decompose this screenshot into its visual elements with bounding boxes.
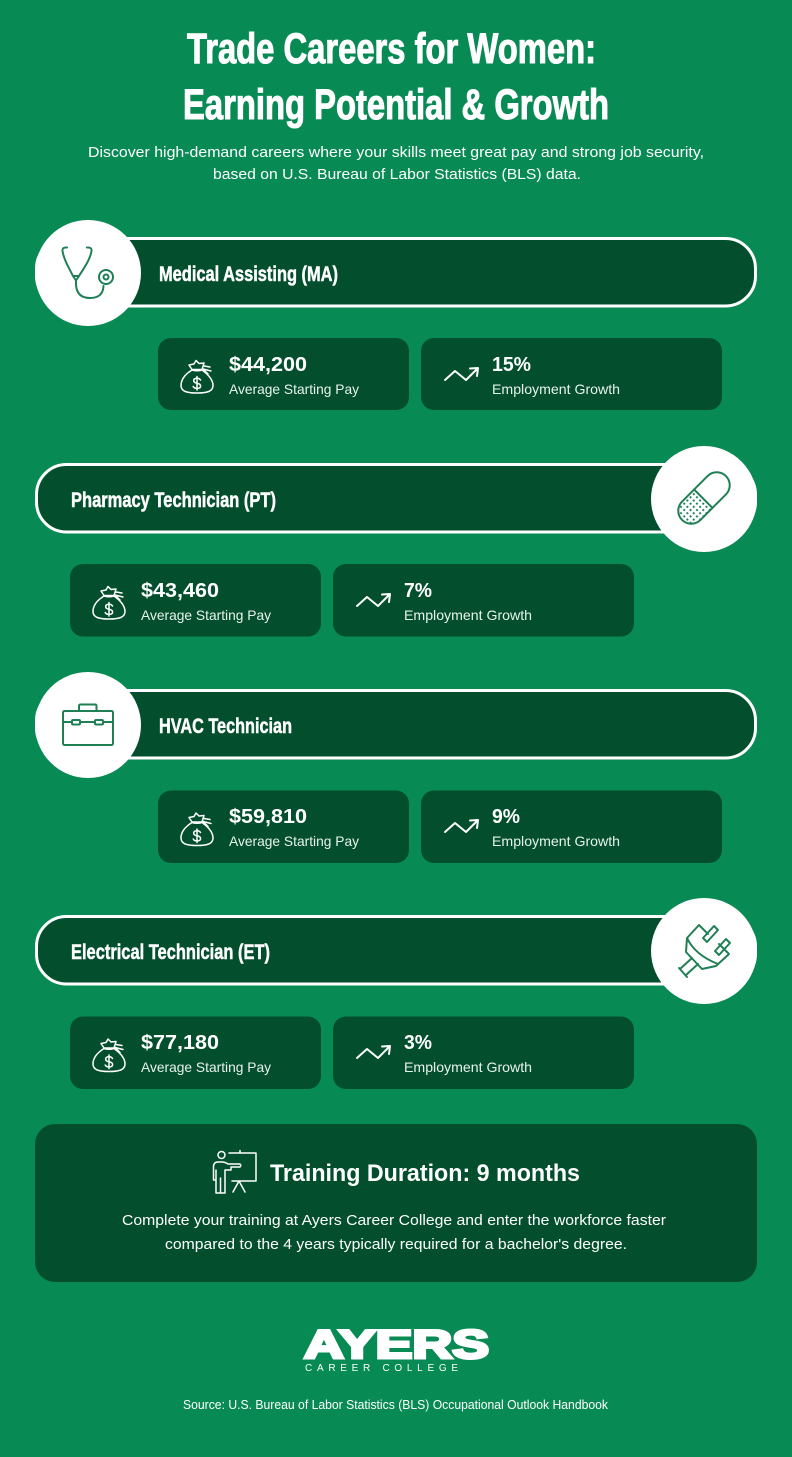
title [183,25,609,129]
stat card: employment growth: Employment Growth [492,381,620,397]
panel: Medical Assisting [35,220,756,410]
heading: Electrical Technician: Electrical Technician (ET) [71,941,270,964]
stat card: employment growth: Employment Growth [404,607,532,623]
stat card: starting pay: Average Starting Pay [141,1059,271,1075]
banner: Pharmacy Technician [36,464,756,532]
title: Trade Careers for Women: [187,25,596,73]
stat card: starting pay [70,1016,321,1089]
stat card: employment growth [421,790,722,863]
stat card: starting pay: $44,200 [229,354,307,376]
heading: training duration: Training Duration: 9 months [270,1160,580,1187]
stat card: employment growth: 15% [492,354,531,376]
stat card: employment growth: 9% [492,806,520,828]
icon circle: plug [651,898,757,1004]
banner: Medical Assisting [36,238,756,306]
icon: trend arrow [357,1046,390,1058]
icon: money bag [93,1039,125,1072]
icon circle: toolbox [35,672,141,778]
subtitle: based on U.S. Bureau of Labor Statistics (BLS) data. [213,166,581,183]
source note: Source: U.S. Bureau of Labor Statistics (BLS) Occupational Outlook Handbook [183,1398,609,1412]
stat card: starting pay [158,790,409,863]
text: training description: Complete your training at Ayers Career College and enter the workforce faster [122,1212,666,1229]
logo: Ayers Career College: AYERS [304,1323,489,1367]
stat card: employment growth [333,1016,634,1089]
stat card: starting pay: $59,810 [229,806,307,828]
subtitle [88,144,704,183]
panel: training duration [35,1124,757,1282]
logo: Ayers Career College: CAREER COLLEGE [305,1363,458,1374]
stat card: starting pay [158,338,409,410]
subtitle: Discover high-demand careers where your skills meet great pay and strong job security, [88,144,704,161]
icon circle: capsule [651,446,757,552]
stat card: starting pay: Average Starting Pay [141,607,271,623]
stat card: starting pay: $43,460 [141,580,219,602]
stat card: employment growth: Employment Growth [404,1059,532,1075]
panel: Electrical Technician [36,898,757,1089]
heading: Pharmacy Technician: Pharmacy Technician (PT) [71,489,276,512]
icon circle: stethoscope [35,220,141,326]
banner: Electrical Technician [36,916,756,984]
icon: money bag [181,813,213,846]
panel: Pharmacy Technician [36,446,757,636]
icon: money bag [181,360,213,393]
stat card: employment growth: 7% [404,580,432,602]
banner: HVAC Technician [36,690,756,758]
logo: Ayers Career College [304,1323,489,1374]
heading: HVAC Technician: HVAC Technician [159,715,292,738]
stat card: starting pay [70,564,321,636]
stat card: starting pay: $77,180 [141,1032,219,1054]
icon: trend arrow [445,368,478,380]
panel: HVAC Technician [35,672,756,863]
icon: money bag [93,586,125,619]
stat card: employment growth [421,338,722,410]
heading: Medical Assisting: Medical Assisting (MA) [159,263,338,286]
stat card: starting pay: Average Starting Pay [229,381,359,397]
stat card: employment growth: 3% [404,1032,432,1054]
stat card: employment growth: Employment Growth [492,833,620,849]
icon: presenter at board [214,1150,256,1193]
stat card: starting pay: Average Starting Pay [229,833,359,849]
stat card: employment growth [333,564,634,636]
text: training description: compared to the 4 years typically required for a bachelor's degree. [165,1236,627,1253]
title: Earning Potential & Growth [183,81,609,129]
icon: trend arrow [445,820,478,832]
icon: trend arrow [357,594,390,606]
text: training description [122,1212,666,1253]
